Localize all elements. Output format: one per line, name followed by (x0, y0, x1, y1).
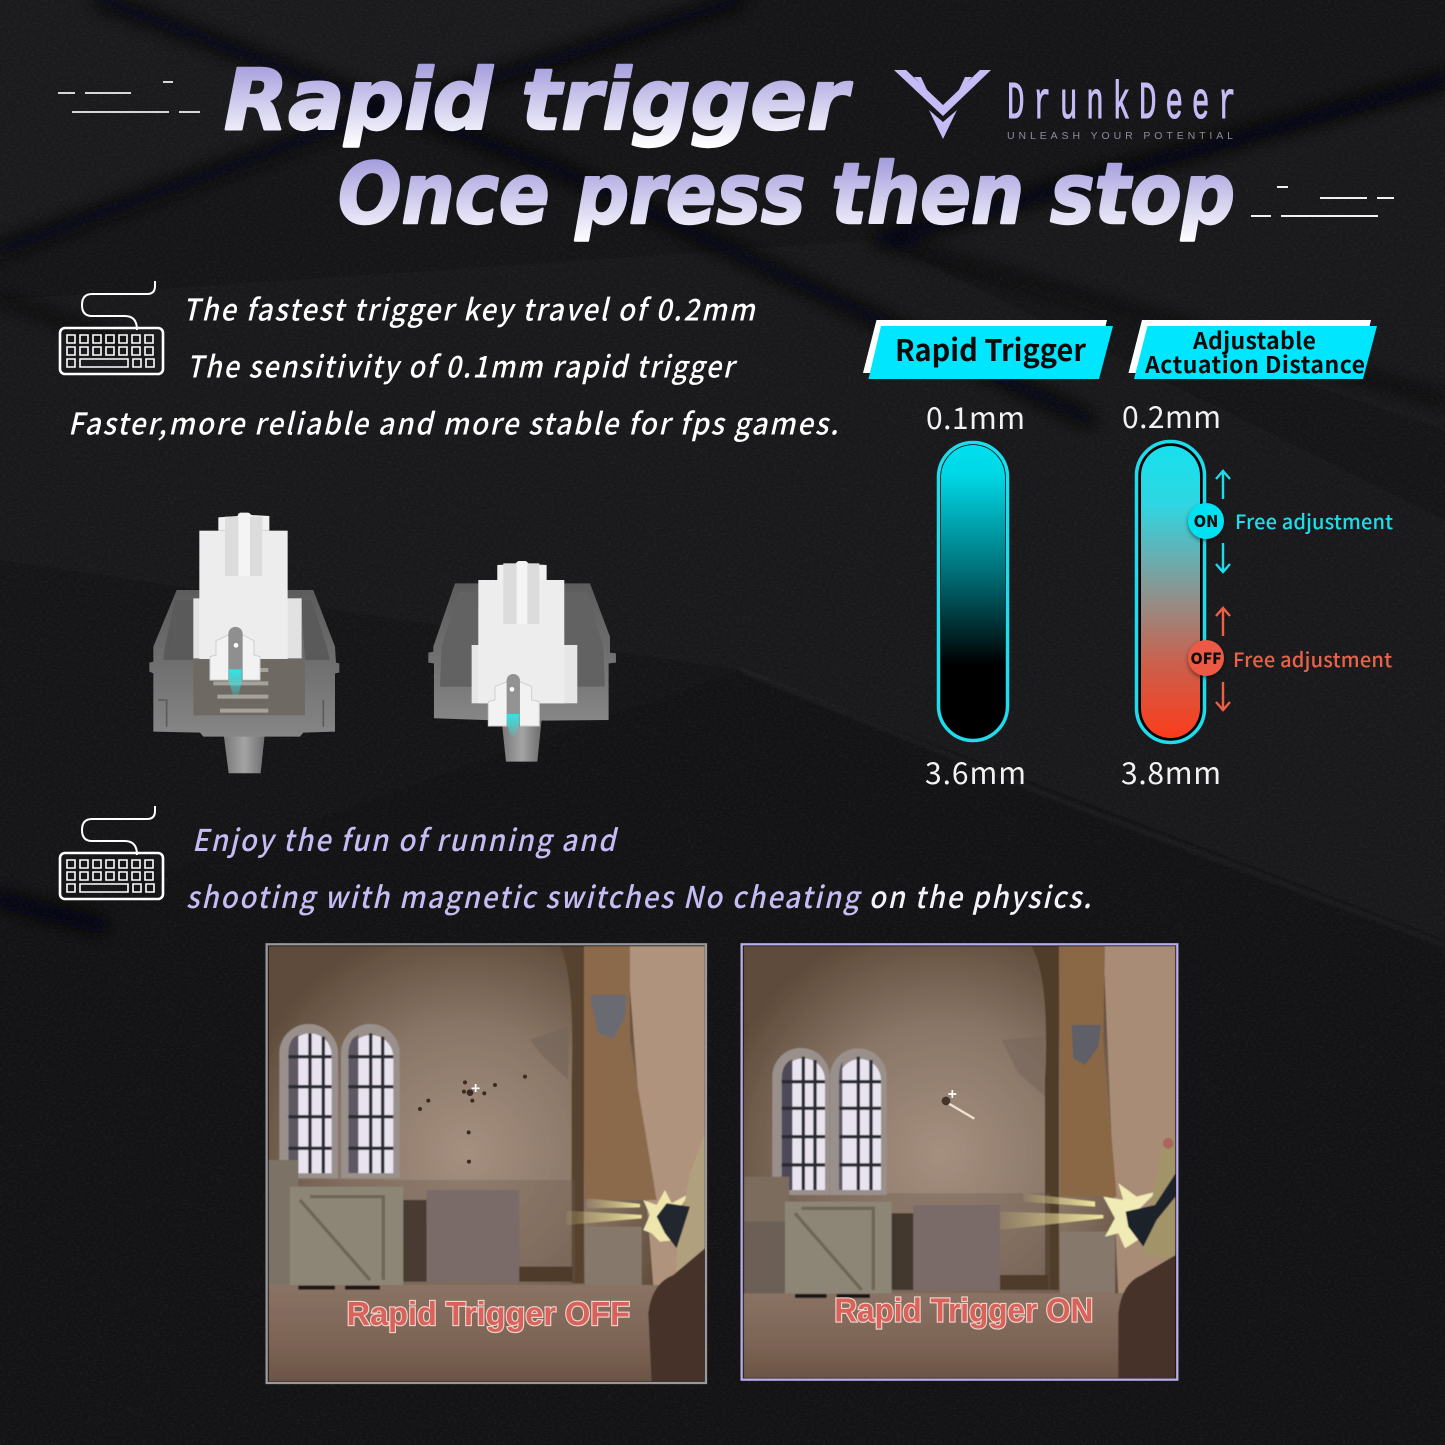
title (224, 51, 1235, 243)
claim: trigger travel: The fastest trigger key travel of 0.2mm (182, 286, 756, 330)
panel: rapid trigger banner (863, 320, 1113, 379)
scene soldier arm (648, 1133, 705, 1382)
line: enjoy: Enjoy the fun of running and (192, 816, 619, 860)
scene crates (268, 1160, 642, 1290)
switch bottom post (223, 732, 265, 773)
panel: adjustable actuation banner (1128, 320, 1377, 380)
decorative speed lines right (1251, 187, 1394, 216)
off knob (1188, 640, 1224, 676)
icon: keyboard top (60, 281, 163, 374)
scene impact (942, 1090, 974, 1119)
off knob: OFF (1191, 647, 1221, 669)
off up arrow (1216, 608, 1230, 636)
scene windows (772, 1048, 887, 1195)
text block: rapid trigger claims (68, 286, 840, 444)
scene floor (268, 1284, 659, 1382)
ON marker (1188, 471, 1393, 572)
switch stem (193, 513, 302, 680)
scene bullet holes (418, 1075, 527, 1164)
scene crates (744, 1177, 1115, 1298)
off down arrow (1216, 682, 1230, 710)
claim: reliability: Faster,more reliable and more stable for fps games. (68, 400, 840, 444)
gauge top label: 0.1mm (926, 394, 1025, 438)
gauge: adjustable actuation 0.2-3.8mm (1121, 393, 1221, 793)
pressed cyan light (507, 714, 519, 737)
gauge: rapid trigger 0.1-3.6mm (925, 394, 1026, 793)
on knob: ON (1194, 508, 1218, 532)
switch spring (213, 670, 268, 711)
switch cavity (193, 659, 305, 715)
title line 2: Once press then stop (338, 145, 1235, 243)
scene soldier arm (1118, 1137, 1176, 1378)
on up arrow (1216, 471, 1230, 499)
banner label line 1: Adjustable (1192, 322, 1316, 356)
brand logo (894, 70, 1236, 142)
text block: magnetic switches (186, 816, 1093, 917)
on label: Free adjustment (1235, 506, 1393, 535)
brand name: DrunkDeer (1007, 73, 1236, 134)
scene artwork on (743, 946, 1176, 1378)
scene artwork off (268, 946, 705, 1382)
cyan light (229, 669, 242, 697)
scene muzzle flash (567, 1190, 690, 1242)
scene caption: Rapid Trigger ON (834, 1293, 1093, 1330)
switch illustration: pressed (428, 561, 616, 762)
pressed switch bottom post (502, 720, 542, 762)
scene muzzle flash (1000, 1183, 1157, 1248)
claim: sensitivity: The sensitivity of 0.1mm rapid trigger (186, 342, 738, 386)
line: shooting: shooting with magnetic switches No cheating on the physics. (186, 873, 1093, 917)
off label: Free adjustment (1233, 644, 1392, 673)
pressed switch housing (428, 583, 616, 721)
gauge bottom label: 3.6mm (925, 749, 1026, 793)
OFF marker (1188, 608, 1392, 710)
gauge top label: 0.2mm (1122, 393, 1221, 437)
banner label line 2: Actuation Distance (1144, 346, 1365, 380)
on knob (1188, 503, 1224, 539)
gauge bottom label: 3.8mm (1121, 749, 1221, 793)
scene floor (743, 1293, 1176, 1378)
panel: game scene rapid trigger on (742, 944, 1177, 1380)
scene windows (279, 1024, 400, 1178)
scene caption: Rapid Trigger OFF (347, 1296, 630, 1333)
pressed switch stem (472, 561, 577, 726)
icon: deer V mark (894, 70, 991, 139)
scene wall (268, 946, 705, 1286)
title line 1: Rapid trigger (224, 51, 853, 149)
decorative speed lines left (58, 82, 200, 112)
panel: game scene rapid trigger off (267, 944, 706, 1383)
pressed switch sensor slot (507, 674, 520, 727)
switch illustration: released (149, 513, 339, 773)
brand tagline: UNLEASH YOUR POTENTIAL (1007, 130, 1233, 142)
on down arrow (1216, 543, 1230, 572)
icon: keyboard bottom (60, 806, 163, 899)
scene wall (743, 946, 1176, 1296)
banner label: Rapid Trigger (895, 326, 1087, 370)
switch sensor slot (228, 627, 243, 680)
switch housing (149, 590, 339, 737)
